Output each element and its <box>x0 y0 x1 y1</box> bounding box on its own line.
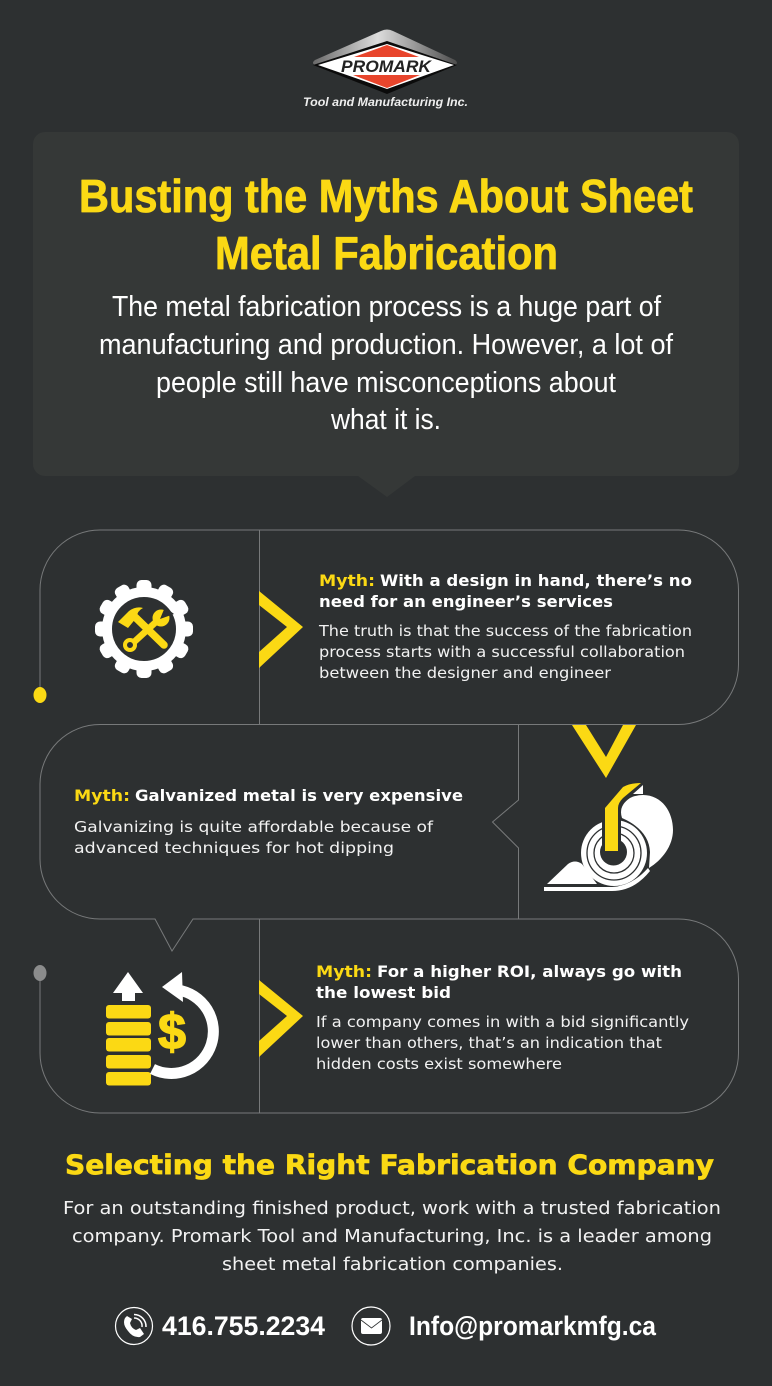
text: myth 1 <box>318 571 692 682</box>
text: myth 2: Myth: <box>74 786 130 805</box>
text: myth 1: The truth is that the success of the fabrication <box>318 622 692 640</box>
title: Metal Fabrication <box>215 227 558 279</box>
logo: Promark Tool and Manufacturing: Tool and Manufacturing Inc. <box>303 95 468 109</box>
intro text: what it is. <box>330 404 441 436</box>
outline: connected myth frames <box>40 530 739 1113</box>
intro text <box>99 291 674 436</box>
chevron: right 2 <box>259 980 303 1057</box>
text: myth 3: If a company comes in with a bid significantly <box>316 1013 689 1031</box>
text: myth 3: lower than others, that’s an indication that <box>316 1034 662 1052</box>
text: closing paragraph <box>63 1198 721 1275</box>
text: myth 1: Myth: <box>319 571 375 590</box>
icon: coins and return arrow <box>106 972 213 1086</box>
text: myth 3: hidden costs exist somewhere <box>316 1055 562 1073</box>
logo: Promark Tool and Manufacturing: PROMARK <box>341 57 433 76</box>
text: myth 1: With a design in hand, there’s no <box>380 571 692 590</box>
icon: envelope <box>352 1307 390 1345</box>
text: myth 1: process starts with a successful collaboration <box>319 643 685 661</box>
marker: grey dot <box>34 965 46 981</box>
text: myth 3: the lowest bid <box>316 983 451 1002</box>
text: myth 2 <box>74 786 463 857</box>
chevron: right 1 <box>259 591 303 668</box>
icon: gear with hammer and wrench <box>95 580 193 678</box>
text: closing paragraph: company. Promark Tool and Manufacturing, Inc. is a leader among <box>72 1226 712 1247</box>
text: myth 3: For a higher ROI, always go with <box>377 962 682 981</box>
icon: coins and return arrow: $ <box>158 1004 186 1060</box>
title <box>79 170 693 279</box>
intro text: The metal fabrication process is a huge part of <box>112 291 662 323</box>
text: myth 1: need for an engineer’s services <box>319 592 613 611</box>
text: myth 1: between the designer and engineer <box>319 664 612 682</box>
logo: Promark Tool and Manufacturing <box>303 30 468 109</box>
email address: Info@promarkmfg.ca <box>409 1311 657 1341</box>
icon: sheet metal roll <box>544 783 673 891</box>
intro text: manufacturing and production. However, a lot of <box>99 329 674 361</box>
title: Busting the Myths About Sheet <box>79 170 693 222</box>
heading: selecting the right company: Selecting the Right Fabrication Company <box>65 1150 714 1181</box>
text: myth 2: advanced techniques for hot dipping <box>74 839 394 857</box>
text: closing paragraph: For an outstanding finished product, work with a trusted fabrication <box>63 1198 721 1219</box>
icon: phone <box>116 1308 152 1344</box>
text: myth 2: Galvanizing is quite affordable because of <box>74 818 434 836</box>
chevron: down <box>572 725 636 778</box>
phone number: 416.755.2234 <box>162 1311 325 1341</box>
text: closing paragraph: sheet metal fabrication companies. <box>222 1254 563 1275</box>
text: myth 3: Myth: <box>316 962 372 981</box>
intro text: people still have misconceptions about <box>156 367 616 399</box>
text: myth 3 <box>316 962 689 1073</box>
panel: intro <box>33 132 739 497</box>
marker: yellow dot <box>34 687 46 703</box>
text: myth 2: Galvanized metal is very expensive <box>135 786 463 805</box>
